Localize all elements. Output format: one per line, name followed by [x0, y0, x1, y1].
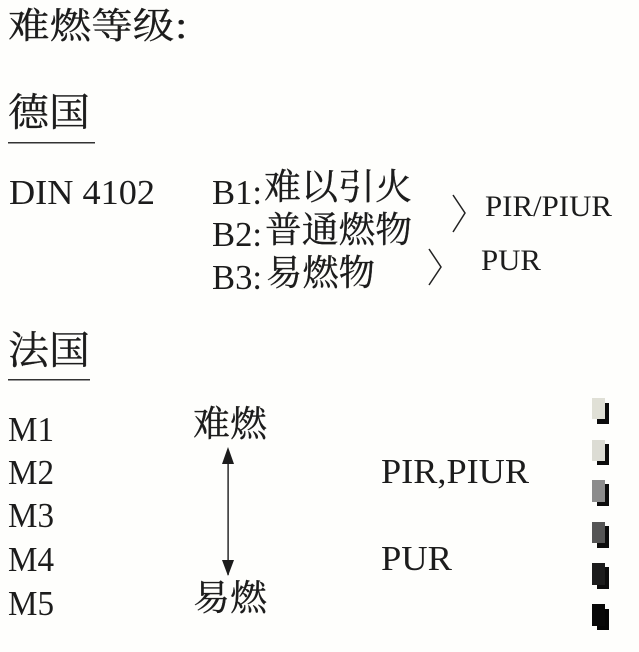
section heading: Germany: 德国	[8, 82, 90, 138]
French class list: M2	[8, 453, 54, 492]
label: easy to ignite: 易燃	[193, 570, 268, 621]
class B1: B1:	[212, 173, 262, 212]
French class list: M1	[8, 410, 54, 449]
swatch M3	[592, 480, 609, 506]
French class list: M4	[8, 540, 54, 579]
section heading: France: 法国	[8, 320, 90, 376]
label: PUR: PUR	[381, 539, 453, 578]
panel: German classes	[212, 159, 412, 297]
class B1: 难以引火	[264, 159, 412, 210]
arrow: double headed scale	[222, 447, 234, 576]
class B3: B3:	[212, 258, 262, 297]
standard label: DIN 4102: DIN 4102	[9, 173, 155, 212]
icon: bracket for PIR/PIUR	[453, 195, 465, 232]
French class list: M5	[8, 584, 54, 623]
smoke swatches	[592, 398, 609, 630]
swatch M4	[592, 522, 609, 548]
class B3	[212, 245, 375, 297]
label: PIR/PIUR: PIR/PIUR	[485, 190, 612, 223]
class B2: B2:	[212, 215, 262, 254]
French class list: M3	[8, 496, 54, 535]
French class list	[8, 410, 54, 623]
label: PUR: PUR	[481, 244, 541, 277]
swatch M6	[592, 604, 609, 630]
label: hard to ignite: 难燃	[193, 396, 268, 447]
swatch M5	[592, 563, 609, 589]
label: PIR,PIUR: PIR,PIUR	[381, 452, 530, 491]
class B3: 易燃物	[266, 245, 375, 296]
swatch M2	[592, 440, 609, 465]
class B1	[212, 159, 412, 212]
icon: bracket for PUR	[429, 249, 441, 285]
swatch M1	[592, 398, 609, 424]
class B2: 普通燃物	[265, 202, 412, 253]
